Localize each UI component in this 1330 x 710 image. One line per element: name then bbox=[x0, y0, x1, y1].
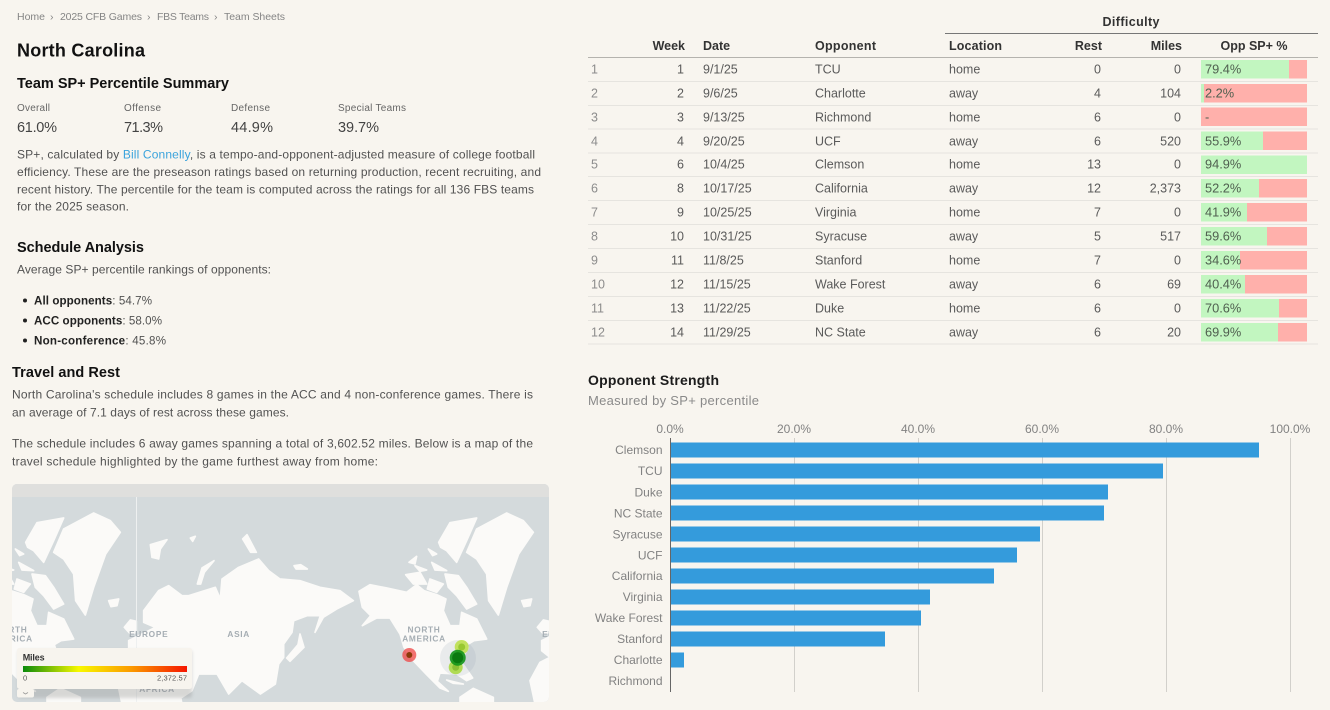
travel text: The schedule includes 6 away games spanning a total of 3,602.52 miles. Below is a map of the bbox=[12, 436, 533, 450]
row 12 bbox=[591, 323, 1307, 342]
row 8: 59.6% bbox=[1205, 228, 1241, 244]
row 5: 5 bbox=[591, 158, 598, 172]
row 5: 13 bbox=[1087, 158, 1101, 172]
row 12: 14 bbox=[670, 326, 684, 340]
travel map: NORTH bbox=[408, 624, 440, 634]
row 1: 9/1/25 bbox=[703, 62, 738, 76]
table header: Opp SP+ % bbox=[1220, 39, 1288, 53]
row 10: Wake Forest bbox=[815, 278, 886, 292]
category labels: Clemson bbox=[615, 443, 662, 457]
row 10: 6 bbox=[1094, 278, 1101, 292]
row 8: 5 bbox=[1094, 230, 1101, 244]
heading: travel and rest: Travel and Rest bbox=[12, 365, 120, 381]
SP+ description bbox=[17, 148, 541, 214]
row 9: 11/8/25 bbox=[703, 254, 744, 268]
row 4 bbox=[591, 132, 1307, 150]
metrics row: Overall bbox=[17, 103, 50, 114]
table header: Miles bbox=[1151, 39, 1182, 53]
schedule intro: Average SP+ percentile rankings of opponents: bbox=[17, 262, 271, 276]
category labels: Wake Forest bbox=[595, 611, 663, 625]
category labels: Duke bbox=[634, 486, 663, 500]
breadcrumb: 2025 CFB Games bbox=[60, 11, 142, 23]
map legend: 2,372.57 bbox=[157, 674, 187, 682]
row 8: 10/31/25 bbox=[703, 230, 752, 244]
row 8: away bbox=[949, 230, 979, 244]
row 5: 6 bbox=[677, 158, 684, 172]
row 12: NC State bbox=[815, 326, 866, 340]
table header: Difficulty bbox=[1102, 15, 1160, 29]
row 10: 11/15/25 bbox=[703, 278, 751, 292]
row 2: 2 bbox=[677, 86, 684, 100]
row 9: home bbox=[949, 254, 980, 268]
row 11: 11/22/25 bbox=[703, 302, 751, 316]
breadcrumb: FBS Teams bbox=[157, 11, 209, 23]
row 3: 0 bbox=[1174, 110, 1181, 124]
x axis: 20.0% bbox=[777, 422, 811, 436]
row 7: 0 bbox=[1174, 206, 1181, 220]
row 11: home bbox=[949, 302, 980, 316]
row 2: Charlotte bbox=[815, 86, 866, 100]
row 1: 0 bbox=[1174, 62, 1181, 76]
schedule bullet list bbox=[23, 294, 166, 348]
row 10: 10 bbox=[591, 278, 605, 292]
row 10 bbox=[591, 275, 1307, 294]
row 6: 10/17/25 bbox=[703, 182, 752, 196]
category labels: TCU bbox=[638, 464, 662, 478]
row 2: 2.2% bbox=[1205, 86, 1234, 100]
row 2: 104 bbox=[1160, 86, 1181, 100]
metrics row: 71.3% bbox=[124, 120, 163, 136]
row 9: Stanford bbox=[815, 254, 862, 268]
row 12: away bbox=[949, 326, 979, 340]
row 9: 7 bbox=[1094, 254, 1101, 268]
row 5: 10/4/25 bbox=[703, 158, 745, 172]
travel map: ASIA bbox=[227, 629, 250, 639]
row 6: 52.2% bbox=[1205, 180, 1241, 196]
table header: Opponent bbox=[815, 39, 877, 53]
row 1: 0 bbox=[1094, 62, 1101, 76]
row 8: Syracuse bbox=[815, 230, 867, 244]
row 6: 12 bbox=[1087, 182, 1101, 196]
bars bbox=[670, 442, 1259, 668]
travel text: travel schedule highlighted by the game furthest away from home: bbox=[12, 454, 378, 468]
row 12: 69.9% bbox=[1205, 324, 1241, 340]
row 3: 6 bbox=[1094, 110, 1101, 124]
row 12: 20 bbox=[1167, 326, 1181, 340]
row 8 bbox=[591, 227, 1307, 246]
row 4: away bbox=[949, 134, 979, 148]
row 4: 520 bbox=[1160, 134, 1181, 148]
row 2: 4 bbox=[1094, 86, 1101, 100]
row 11: 6 bbox=[1094, 302, 1101, 316]
row 7: 7 bbox=[591, 206, 598, 220]
schedule bullet list: ACC opponents: 58.0% bbox=[34, 314, 162, 328]
schedule table bbox=[588, 15, 1318, 344]
row 7: 10/25/25 bbox=[703, 206, 752, 220]
row 9: 11 bbox=[671, 254, 684, 268]
row 3: home bbox=[949, 110, 980, 124]
row separators bbox=[588, 81, 1318, 344]
metrics row: 39.7% bbox=[338, 120, 379, 136]
category labels: NC State bbox=[614, 506, 663, 520]
metrics row: Offense bbox=[124, 103, 161, 114]
row 9: 34.6% bbox=[1205, 252, 1241, 268]
travel map bbox=[12, 484, 549, 702]
travel map: EUROPE bbox=[129, 629, 168, 639]
category labels bbox=[595, 443, 663, 688]
row 6: 6 bbox=[591, 182, 598, 196]
breadcrumb: Home bbox=[17, 11, 45, 23]
row 4: UCF bbox=[815, 134, 841, 148]
travel text bbox=[12, 388, 533, 468]
x axis: 60.0% bbox=[1025, 422, 1059, 436]
row 9: 9 bbox=[591, 254, 598, 268]
breadcrumb: › bbox=[214, 11, 218, 23]
row 11: 0 bbox=[1174, 302, 1181, 316]
breadcrumb bbox=[17, 11, 285, 23]
x axis bbox=[656, 422, 1311, 692]
heading: schedule analysis: Schedule Analysis bbox=[17, 240, 144, 256]
metrics row: Defense bbox=[231, 103, 270, 114]
map legend: 0 bbox=[23, 674, 27, 682]
row 1: 79.4% bbox=[1205, 62, 1241, 76]
row 2: 9/6/25 bbox=[703, 86, 738, 100]
row 2 bbox=[591, 84, 1307, 102]
row 2: away bbox=[949, 86, 979, 100]
row 11: 70.6% bbox=[1205, 300, 1241, 316]
row 5: 0 bbox=[1174, 158, 1181, 172]
row 10: 12 bbox=[670, 278, 684, 292]
travel map: AMERICA bbox=[402, 634, 446, 644]
category labels: Charlotte bbox=[614, 653, 663, 667]
category labels: Richmond bbox=[608, 674, 662, 688]
row 9 bbox=[591, 251, 1307, 270]
row 10: 40.4% bbox=[1205, 276, 1241, 292]
breadcrumb: › bbox=[147, 11, 151, 23]
row 5: Clemson bbox=[815, 158, 864, 172]
chart title: Opponent Strength bbox=[588, 372, 719, 388]
row 11: 13 bbox=[670, 302, 684, 316]
row 6 bbox=[591, 179, 1307, 198]
row 7: 41.9% bbox=[1205, 204, 1241, 220]
row 3: 3 bbox=[591, 110, 598, 124]
row 5 bbox=[591, 156, 1307, 174]
row 9: 0 bbox=[1174, 254, 1181, 268]
x axis: 40.0% bbox=[901, 422, 935, 436]
breadcrumb: Team Sheets bbox=[224, 11, 285, 23]
row 7: 7 bbox=[1094, 206, 1101, 220]
breadcrumb: › bbox=[50, 11, 54, 23]
title: North Carolina bbox=[17, 40, 146, 60]
travel text: North Carolina's schedule includes 8 games in the ACC and 4 non-conference games. There is bbox=[12, 388, 533, 402]
row 11: 11 bbox=[591, 302, 604, 316]
map legend bbox=[17, 648, 192, 698]
row 3: 3 bbox=[677, 110, 684, 124]
row 1: 1 bbox=[677, 62, 684, 76]
row 8: 517 bbox=[1160, 230, 1181, 244]
SP+ description: SP+, calculated by Bill Connelly, is a tempo-and-opponent-adjusted measure of college football bbox=[17, 148, 535, 162]
row 1 bbox=[591, 60, 1307, 78]
row 7: 9 bbox=[677, 206, 684, 220]
row 8: 10 bbox=[670, 230, 684, 244]
row 7 bbox=[591, 203, 1307, 222]
metrics row: 61.0% bbox=[17, 120, 57, 136]
chart subtitle: Measured by SP+ percentile bbox=[588, 393, 759, 408]
bar chart: opponent strength bbox=[595, 422, 1311, 692]
metrics row bbox=[17, 103, 406, 136]
SP+ description: for the 2025 season. bbox=[17, 200, 129, 214]
row 10: away bbox=[949, 278, 979, 292]
row 12: 12 bbox=[591, 326, 605, 340]
travel map: AFRICA bbox=[139, 684, 175, 694]
row 11 bbox=[591, 299, 1307, 318]
travel map: EUROPE bbox=[542, 629, 581, 639]
table header: Rest bbox=[1075, 39, 1103, 53]
table header: Location bbox=[949, 39, 1002, 53]
metrics row: 44.9% bbox=[231, 120, 273, 136]
row 1: 1 bbox=[591, 62, 598, 76]
table header: Week bbox=[653, 39, 685, 53]
travel text: an average of 7.1 days of rest across these games. bbox=[12, 406, 289, 420]
category labels: California bbox=[612, 569, 663, 583]
row 4: 55.9% bbox=[1205, 134, 1241, 148]
schedule bullet list: All opponents: 54.7% bbox=[34, 294, 152, 308]
row 6: 8 bbox=[677, 182, 684, 196]
x axis: 100.0% bbox=[1270, 422, 1311, 436]
schedule bullet list: Non-conference: 45.8% bbox=[34, 334, 166, 348]
row 4: 4 bbox=[591, 134, 598, 148]
row 12: 6 bbox=[1094, 326, 1101, 340]
row 8: 8 bbox=[591, 230, 598, 244]
row 1: home bbox=[949, 62, 980, 76]
row 1: TCU bbox=[815, 62, 841, 76]
table header bbox=[588, 15, 1318, 58]
map legend: Miles bbox=[23, 652, 45, 662]
row 2: 2 bbox=[591, 86, 598, 100]
row 6: California bbox=[815, 182, 868, 196]
row 5: home bbox=[949, 158, 980, 172]
row 4: 4 bbox=[677, 134, 684, 148]
row 6: away bbox=[949, 182, 979, 196]
row 7: Virginia bbox=[815, 206, 857, 220]
row 6: 2,373 bbox=[1150, 182, 1181, 196]
table header: Date bbox=[703, 39, 730, 53]
category labels: UCF bbox=[638, 548, 662, 562]
row 10: 69 bbox=[1167, 278, 1181, 292]
row 4: 6 bbox=[1094, 134, 1101, 148]
metrics row: Special Teams bbox=[338, 103, 406, 114]
row 5: 94.9% bbox=[1205, 156, 1241, 172]
row 3 bbox=[591, 108, 1307, 126]
x axis: 0.0% bbox=[656, 422, 684, 436]
row 3: 9/13/25 bbox=[703, 110, 745, 124]
row 12: 11/29/25 bbox=[703, 326, 751, 340]
heading: team summary: Team SP+ Percentile Summary bbox=[17, 76, 229, 92]
category labels: Syracuse bbox=[612, 528, 663, 542]
category labels: Virginia bbox=[623, 590, 663, 604]
SP+ description: efficiency. These are the preseason ratings based on returning production, recent recruiting, and bbox=[17, 165, 541, 179]
category labels: Stanford bbox=[617, 632, 662, 646]
row 3: Richmond bbox=[815, 110, 871, 124]
x axis: 80.0% bbox=[1149, 422, 1183, 436]
row 4: 9/20/25 bbox=[703, 134, 745, 148]
SP+ description: recent history. The percentile for the team is computed across the ratings for all 136 FBS teams bbox=[17, 182, 534, 196]
row 3: - bbox=[1205, 110, 1209, 124]
row 7: home bbox=[949, 206, 980, 220]
row 11: Duke bbox=[815, 302, 844, 316]
